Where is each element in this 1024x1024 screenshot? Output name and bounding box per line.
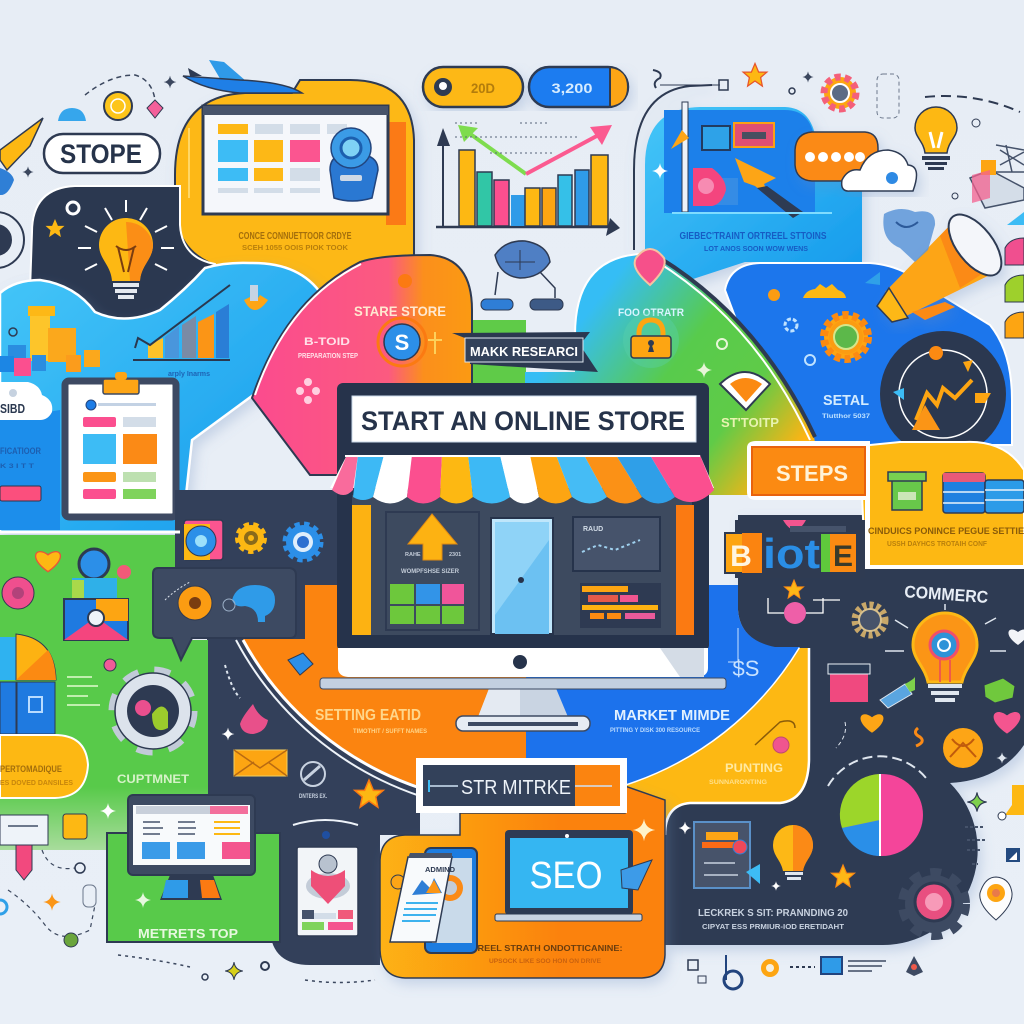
icon: ribbon market research: MAKK RESEARCI <box>470 344 578 359</box>
icon: mini window cards <box>702 123 774 150</box>
icon: gear green <box>824 315 868 359</box>
text: punting <box>709 761 783 786</box>
text: market mimde: PITTING Y DISK 300 RESOURCE <box>610 728 700 734</box>
chart: bar chart with arrows <box>436 123 620 236</box>
panel: green lock <box>525 249 825 495</box>
text: dark panel caption: LECKREK S SIT: PRANNDING 20 <box>698 908 848 919</box>
panel: yellow callout <box>0 735 88 798</box>
icon: needle and ball <box>755 721 795 753</box>
panel: dark right commerce <box>665 515 1024 945</box>
shop screen <box>352 495 694 635</box>
panel: green metrics <box>107 795 280 942</box>
icon: gear top <box>824 77 856 109</box>
icon: yellow heart <box>36 552 60 572</box>
text: punting: SUNNARONTING <box>709 779 767 786</box>
text: stare store: PREPARATION STEP <box>298 353 358 360</box>
text: top blue caption: LOT ANOS SOON WOW WENS <box>704 246 808 253</box>
icon: S coin <box>378 274 442 366</box>
chart: rising wedge bars: arply Inarms <box>168 371 210 378</box>
icon: airplane <box>183 60 302 93</box>
icon: ribbon market research <box>452 332 598 372</box>
icon: orange chat bubble and cloud <box>795 132 917 191</box>
icon: small monitor <box>128 795 255 900</box>
text: SEO caption: UPSOCK LIKE SOO HON ON DRIVE <box>489 958 602 965</box>
text: left blue caption: K 3 I T T <box>0 464 34 470</box>
text: steps panel caption: CINDUICS PONINCE PEGUE SETTIE <box>868 526 1024 536</box>
text: yellow panel caption <box>238 231 352 252</box>
panel: speech bubble <box>153 568 296 660</box>
screen in yellow panel <box>203 106 388 214</box>
panel: blue market half circle <box>526 585 800 800</box>
text: st'toitp: ST'TOITP <box>721 415 779 430</box>
icon: blue cube <box>288 653 313 675</box>
panel: green lower left <box>0 532 208 880</box>
icon: tabs at right edge <box>1005 212 1024 338</box>
icon: document with ball <box>679 822 760 888</box>
text: SETAL: SETAL <box>823 392 869 409</box>
panel: yellow callout: ES DOVED DANSILES <box>0 780 73 787</box>
icon: database stacks <box>943 473 1024 513</box>
text: foo otratr: FOO OTRATR <box>618 307 684 319</box>
monitor stand <box>320 678 726 731</box>
icons: envelope and star on dark <box>222 665 383 807</box>
banner: str mitrke <box>416 758 627 813</box>
panel: deep blue settings <box>725 263 1012 457</box>
icon: blue blob <box>865 209 935 285</box>
panel: yellow punting <box>625 648 809 835</box>
icon: clover dots <box>296 378 320 404</box>
icon: yellow gear <box>238 525 264 551</box>
panel: dark lightbulb <box>30 186 225 325</box>
banner: str mitrke: STR MITRKE <box>461 777 571 799</box>
logo: biotie blocks: iot <box>763 530 820 577</box>
logo: biotie blocks: E <box>833 540 853 573</box>
icon: phone and document <box>390 848 477 953</box>
text: punting: PUNTING <box>725 761 783 775</box>
text: yellow panel caption: CONCE CONNUETTOOR CRDYE <box>238 231 352 242</box>
icon: connector with star and brain <box>768 580 840 624</box>
text: SEO caption <box>478 943 623 965</box>
text: dark panel caption <box>698 908 848 931</box>
text: market mimde: MARKET MIMDE <box>614 707 730 724</box>
panel: conversion yellow <box>175 80 414 290</box>
text: commerce: COMMERC <box>904 582 989 607</box>
icon: clipboard <box>65 372 176 517</box>
icon: silver gear <box>104 659 191 749</box>
panel: yellow callout: PERTOMADIQUE <box>0 764 62 774</box>
text: left blue caption: FICATIOOR <box>0 446 41 456</box>
icon: pink donut <box>2 577 34 609</box>
decorative lower-right <box>965 785 1024 920</box>
text: metrets top: METRETS TOP <box>138 926 238 941</box>
text: SETAL <box>822 392 871 420</box>
icon: monitor storefront <box>320 383 726 731</box>
icon: phone with profile <box>293 820 358 936</box>
pill: 20D yellow: 20D <box>471 80 495 96</box>
text: setting eatid <box>315 707 427 735</box>
icon: cursor arrow <box>735 158 803 218</box>
logo: biotie blocks <box>725 520 865 578</box>
chart panels right: RAUD <box>583 526 603 533</box>
icons: pen, box, hearts <box>836 630 1024 768</box>
icon: phone and document: ADMIND <box>425 867 455 874</box>
text: cuptmnet: CUPTMNET <box>117 772 190 786</box>
pill: 20D yellow <box>423 67 523 107</box>
icon: flag stick <box>671 102 689 212</box>
pill: 3,200 blue: 3,200 <box>552 80 593 96</box>
panel: steps yellow <box>747 441 1024 567</box>
icon: orange shield <box>720 372 770 410</box>
panel: top blue with cursor <box>634 85 862 280</box>
icon: top-right bulb <box>915 107 957 170</box>
text: stare store: B-TOID <box>304 336 350 348</box>
shop door <box>491 518 553 634</box>
text: stare store <box>298 303 446 360</box>
icon: location pin <box>635 249 665 285</box>
title box: START AN ONLINE STORE <box>361 406 685 436</box>
text: SETAL: Tlutthor 5037 <box>822 414 871 420</box>
monitor body <box>337 383 709 677</box>
text: market mimde <box>610 707 730 734</box>
icon: pink gift box <box>828 664 870 702</box>
text: top blue caption <box>680 231 827 253</box>
panel: dark middle left <box>175 490 420 965</box>
icon: S coin: S <box>395 330 409 355</box>
awning <box>330 455 714 504</box>
logo: biotie blocks: B <box>730 540 752 573</box>
icon: tan gear <box>855 605 885 635</box>
text: stare store: STARE STORE <box>354 303 446 319</box>
pill: 3,200 blue <box>529 67 628 107</box>
text: steps panel caption: USSH DAYHCS TROTAIH CONF <box>887 541 988 548</box>
icon: padlock <box>623 312 679 368</box>
text: setting eatid: TIMOTHIT / SUFFT NAMES <box>353 729 427 735</box>
icon: lightbulb <box>46 200 174 299</box>
panel: orange SEO <box>380 786 665 978</box>
icon: dark ring at left edge <box>0 212 24 268</box>
icon: envelope with camera <box>64 549 131 640</box>
icon: dark circle graph <box>880 331 1006 457</box>
chart: rising wedge bars <box>133 285 268 378</box>
icon: white tag and pink arrow <box>0 814 87 880</box>
icon: big bulb <box>885 604 1006 702</box>
icon: photo tile <box>184 520 223 560</box>
icon: brain network <box>481 241 563 310</box>
text: top blue caption: GIEBEC'TRAINT ORTREEL STTOINS <box>680 231 827 242</box>
chart: pie <box>828 756 926 856</box>
icon: megaphone <box>877 206 1011 322</box>
text: SEO caption: REEL STRATH ONDOTTICANINE: <box>478 943 623 953</box>
icon: stacked blocks <box>0 306 100 376</box>
button: steps <box>752 447 865 495</box>
text: dark panel caption: CIPYAT ESS PRMIUR-IOD ERETIDAHT <box>702 922 844 931</box>
panel: pink store <box>252 255 472 475</box>
text: steps panel caption <box>868 526 1024 548</box>
icon: dark gear with pink center <box>905 875 963 933</box>
title box <box>352 396 696 442</box>
icon: pie dome and blue tiles <box>0 634 100 734</box>
pill label: STOPE <box>44 134 160 173</box>
panel: green center strip <box>465 320 526 386</box>
pill label: STOPE: STOPE <box>60 139 142 169</box>
panel: orange setting half circle <box>236 585 526 800</box>
text: setting eatid: SETTING EATID <box>315 707 421 724</box>
decorative lower-left dashes <box>0 850 375 982</box>
chart panels right <box>573 517 661 628</box>
text: yellow panel caption: SCEH 1055 OOIS PIOK TOOK <box>242 245 348 252</box>
button: steps: STEPS <box>776 461 848 486</box>
decorative top-right items <box>653 64 1020 127</box>
store panel left: WOMPFSHSE SIZER <box>401 569 460 575</box>
icon: green crate <box>888 472 926 510</box>
icon: small bulb <box>771 825 854 891</box>
icons: envelope and star on dark: DNTERS EX. <box>299 794 327 800</box>
icon: webcam <box>330 128 378 201</box>
icon: cloud label <box>0 382 52 420</box>
store panel left <box>386 512 479 630</box>
icons: bottom row <box>688 955 923 989</box>
store panel left: RAHE <box>405 552 421 558</box>
store panel left: 2301 <box>449 552 461 558</box>
icon: blue gear <box>286 525 320 559</box>
icon: isometric warehouse <box>952 145 1024 208</box>
text: left blue caption <box>0 446 41 501</box>
icon: cloud label: SIBD <box>0 401 25 416</box>
icon: dollar marks: $S <box>733 656 759 681</box>
icon: laptop SEO <box>495 819 655 921</box>
icon: pencil <box>0 118 43 195</box>
decorative top-left coin and cloud <box>58 75 176 121</box>
panel: cyan growth <box>0 263 322 532</box>
icon: dollar marks <box>728 628 759 681</box>
text: SEO: SEO <box>530 855 602 897</box>
icon: pink donut card <box>693 168 738 206</box>
